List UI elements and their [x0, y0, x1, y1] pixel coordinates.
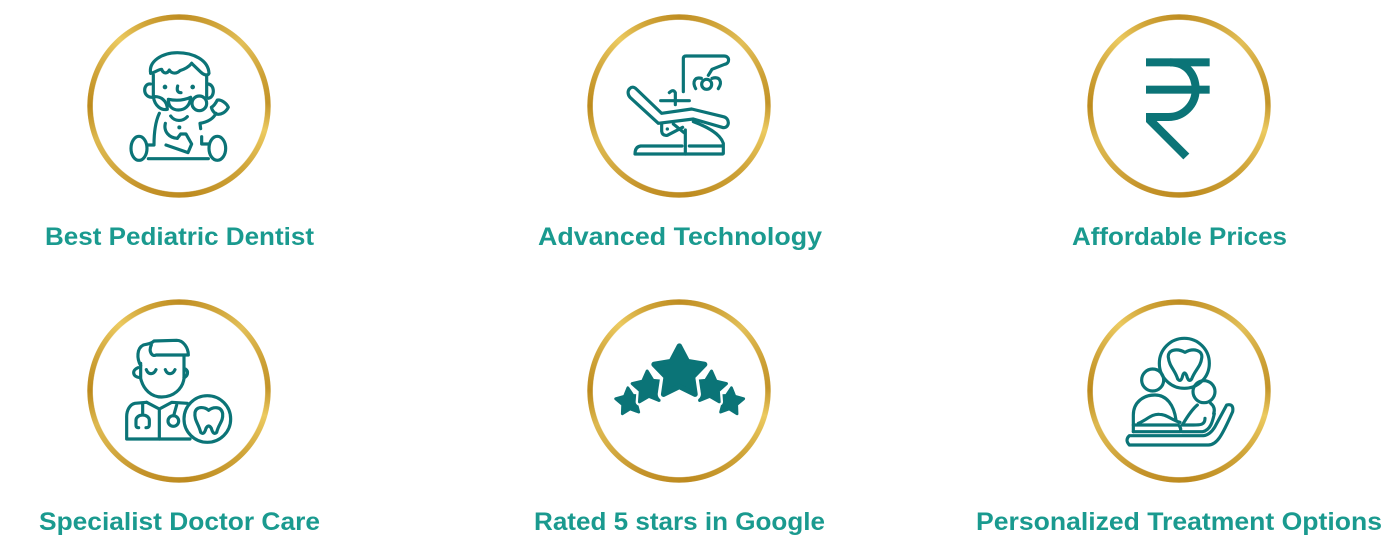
icon: five stars — [614, 343, 746, 416]
label: Advanced Technology — [538, 223, 822, 251]
panel: best pediatric dentist — [45, 14, 315, 251]
gold ring — [87, 14, 271, 198]
gold ring — [587, 14, 771, 198]
gold ring — [1087, 14, 1271, 198]
label: Rated 5 stars in Google — [534, 508, 825, 536]
panel: personalized treatment options — [976, 299, 1382, 536]
icon: baby — [129, 51, 230, 162]
label: Personalized Treatment Options — [976, 508, 1382, 536]
icon: dentist and patient with tooth — [1125, 336, 1234, 447]
panel: advanced technology — [538, 14, 822, 251]
panel: rated 5 stars — [534, 299, 825, 536]
label: Affordable Prices — [1072, 223, 1287, 251]
gold ring — [587, 299, 771, 483]
icon: dental chair — [626, 54, 730, 156]
panel: specialist doctor care — [39, 299, 320, 536]
gold ring — [1087, 299, 1271, 483]
label: Best Pediatric Dentist — [45, 223, 315, 251]
label: Specialist Doctor Care — [39, 508, 320, 536]
gold ring — [87, 299, 271, 483]
icon: doctor with tooth — [125, 338, 232, 444]
icon: rupee — [1146, 58, 1210, 160]
panel: affordable prices — [1072, 14, 1287, 251]
